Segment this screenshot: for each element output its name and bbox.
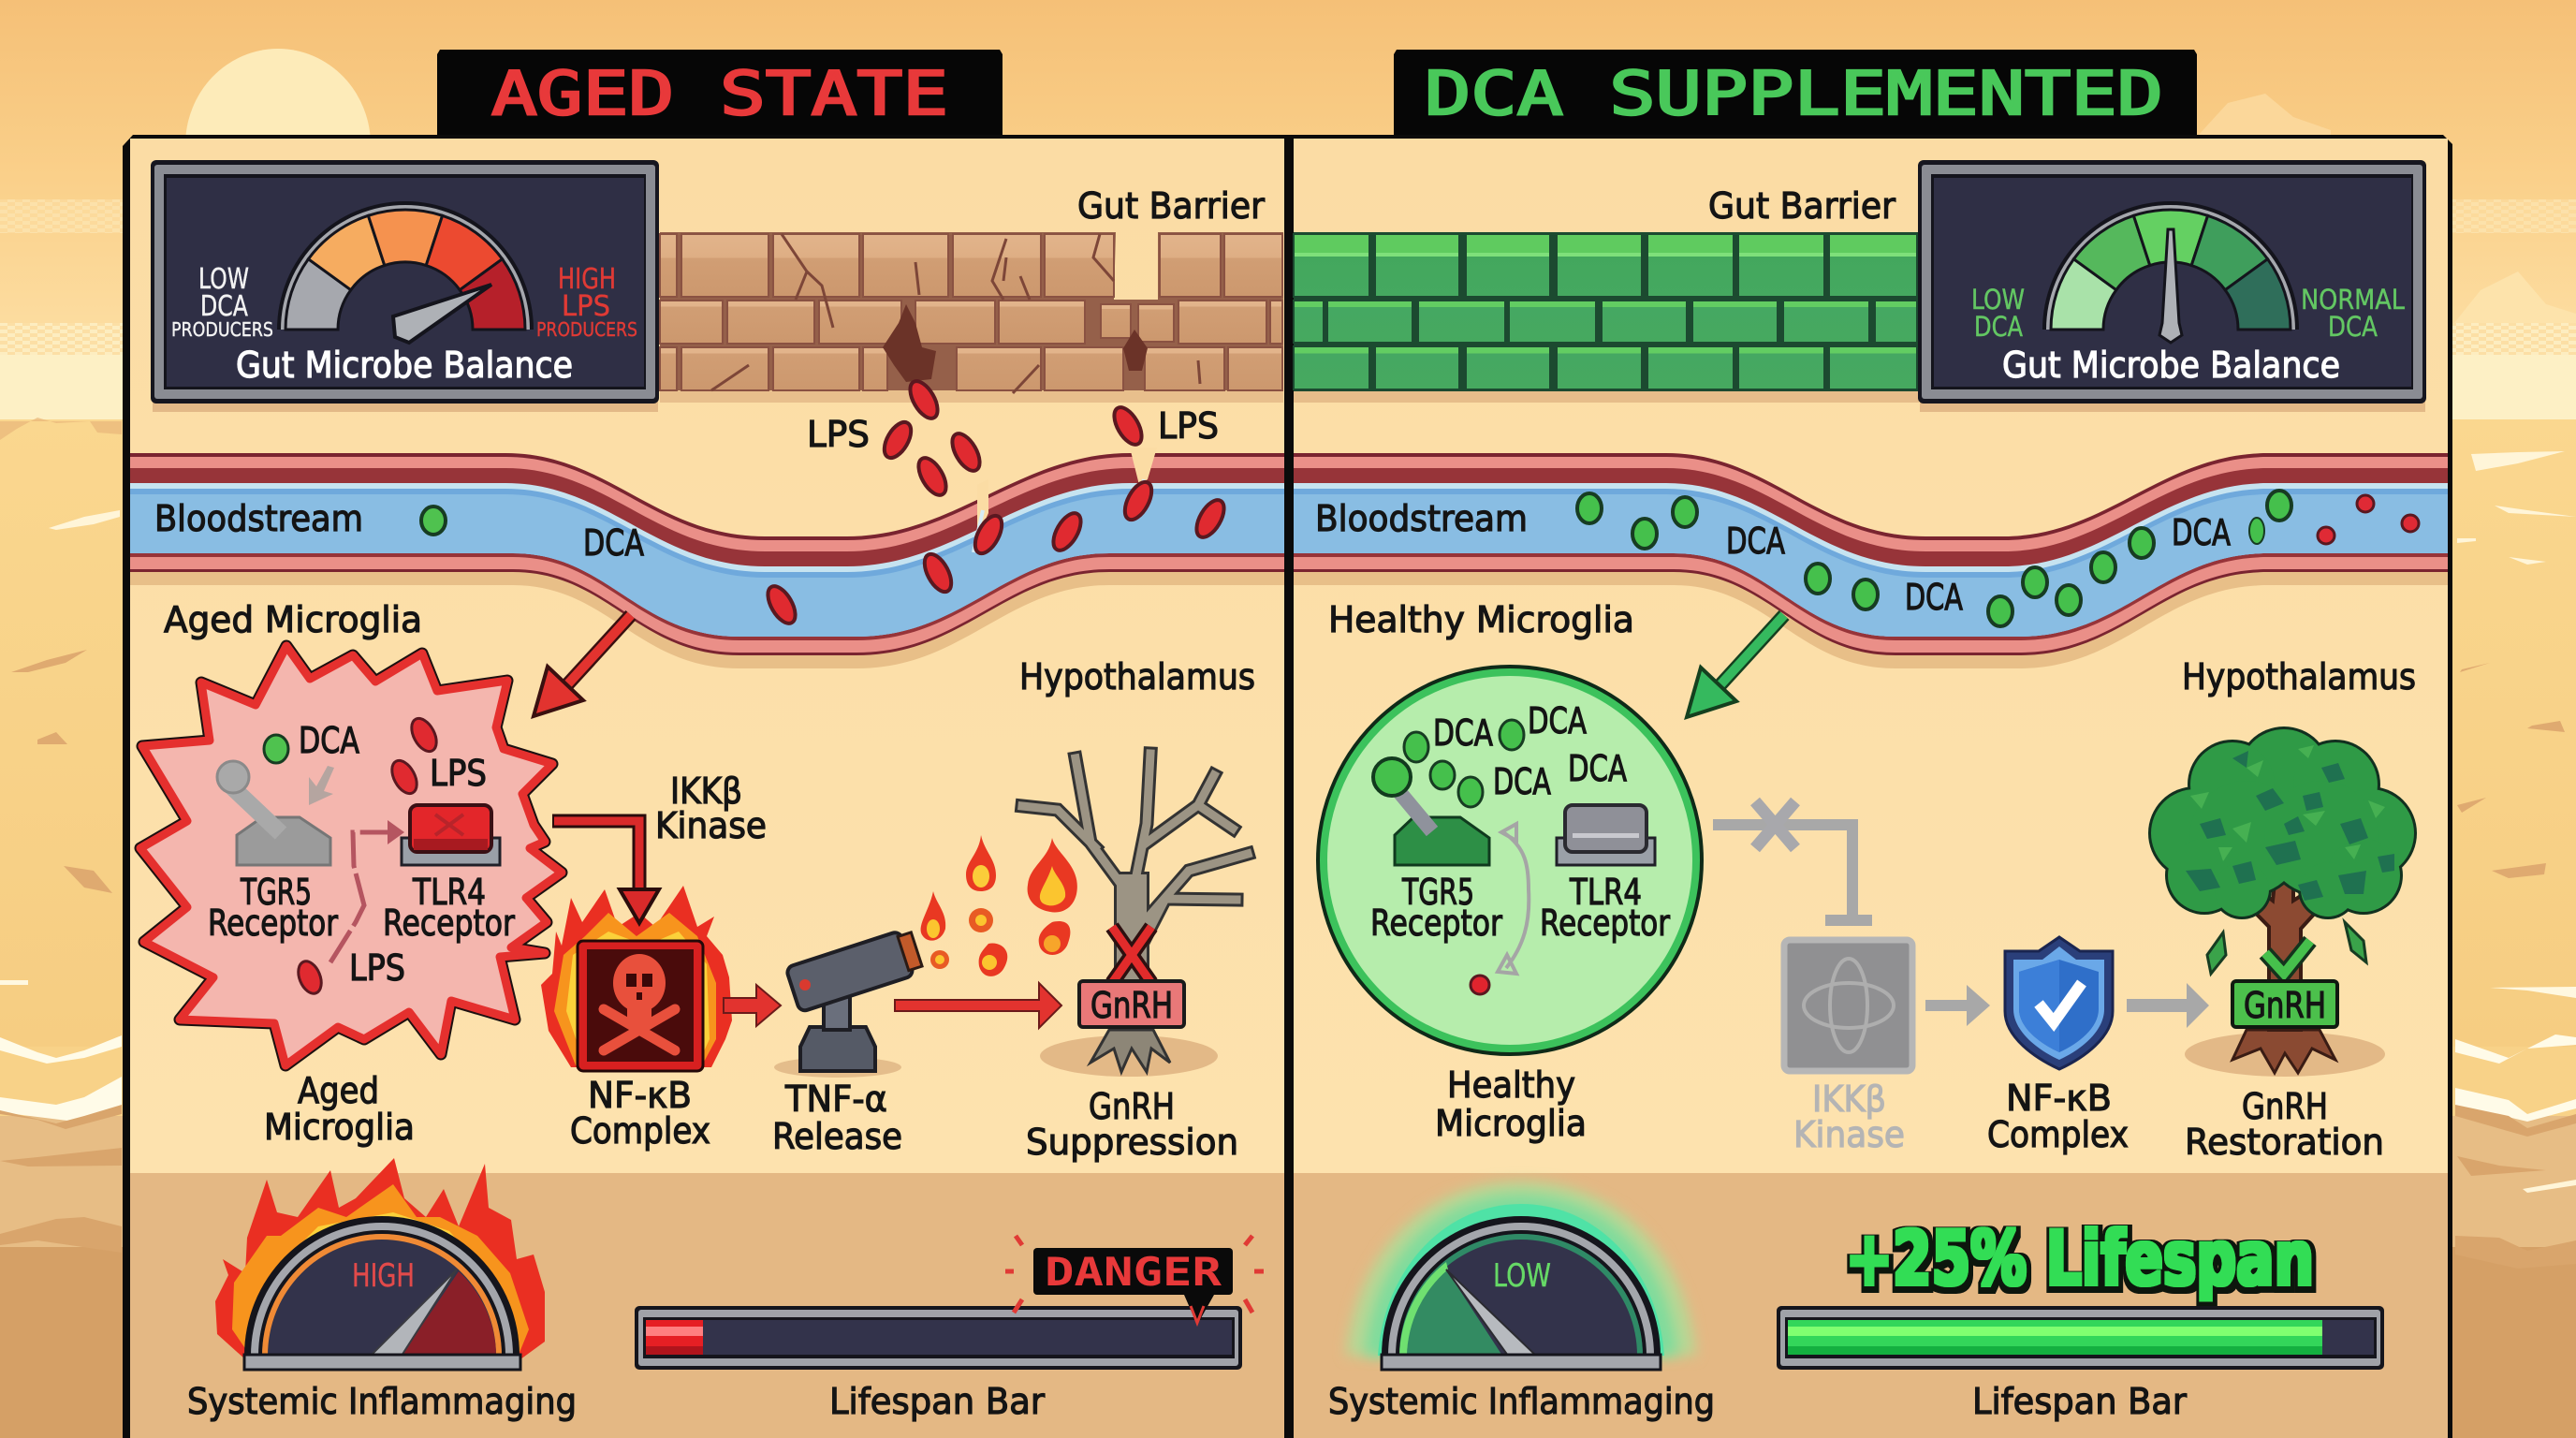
fireballs bbox=[921, 835, 1077, 976]
GnRH plaque restored bbox=[2232, 981, 2337, 1027]
healthy microglia round cell: Receptor bbox=[1540, 902, 1670, 944]
title tab: AGED STATE bbox=[437, 50, 1003, 142]
red LPS dot bbox=[1471, 976, 1489, 994]
gauge panel: gut microbe balance aged: HIGH bbox=[558, 263, 616, 296]
icon: TNF-alpha cannon bbox=[774, 931, 922, 1078]
gauge panel: gut microbe balance supplemented bbox=[1918, 160, 2426, 412]
label: healthy microglia caption: Microglia bbox=[1435, 1103, 1587, 1144]
healthy microglia round cell: Receptor bbox=[1370, 902, 1502, 944]
LPS molecules in aged cell bbox=[294, 714, 442, 997]
healthy microglia round cell: DCA bbox=[1528, 700, 1587, 741]
label: GnRH suppression: Suppression bbox=[1026, 1122, 1238, 1163]
aged microglia spiky cell: LPS bbox=[430, 753, 487, 794]
gauge panel: gut microbe balance supplemented: DCA bbox=[1974, 311, 2023, 343]
label: TNF alpha release: Release bbox=[772, 1116, 902, 1157]
callout: danger bbox=[1005, 1236, 1264, 1325]
canopy bbox=[2148, 726, 2417, 919]
heading: aged microglia: Aged Microglia bbox=[164, 599, 422, 640]
callout: plus 25 percent lifespan: +25% Lifespan bbox=[1846, 1215, 2314, 1302]
activated TLR4 button bbox=[402, 805, 500, 865]
heading: healthy microglia: Healthy Microglia bbox=[1328, 599, 1634, 640]
GnRH plaque suppressed bbox=[1079, 981, 1184, 1027]
gauge: systemic inflammaging low with green glow: LOW bbox=[1493, 1257, 1551, 1295]
icon: healthy tree with restored GnRH: GnRH bbox=[2244, 985, 2326, 1026]
gauge: systemic inflammaging high with flames bbox=[215, 1158, 545, 1370]
bloodstream labels bbox=[154, 405, 2231, 618]
title tab: DCA SUPPLEMENTED: DCA SUPPLEMENTED bbox=[1425, 60, 2163, 129]
gauge panel: gut microbe balance supplemented: NORMAL bbox=[2301, 284, 2405, 315]
label: aged microglia caption: Microglia bbox=[264, 1107, 415, 1148]
label: TNF alpha release bbox=[772, 1078, 902, 1157]
bloodstream labels: DCA bbox=[2172, 512, 2231, 553]
label: NF-kB complex aged: NF-κB bbox=[588, 1075, 692, 1116]
heading: hypothalamus left: Hypothalamus bbox=[1019, 656, 1255, 697]
icon: grey IKK kinase box bbox=[1784, 940, 1912, 1071]
label: IKK beta kinase faded bbox=[1793, 1078, 1905, 1155]
label: NF-kB complex supplemented bbox=[1987, 1078, 2129, 1155]
gauge panel: gut microbe balance supplemented: LOW bbox=[1971, 284, 2025, 315]
label: GnRH restoration bbox=[2185, 1086, 2384, 1163]
green check bbox=[2265, 941, 2310, 974]
gauge: systemic inflammaging low with green glow bbox=[1346, 1181, 1696, 1370]
healthy microglia round cell: TGR5 bbox=[1401, 872, 1474, 913]
aged microglia spiky cell: Receptor bbox=[208, 902, 338, 944]
gauge: systemic inflammaging high with flames: HIGH bbox=[352, 1257, 415, 1295]
label: GnRH suppression: GnRH bbox=[1089, 1086, 1175, 1127]
label: GnRH restoration: GnRH bbox=[2242, 1086, 2328, 1127]
aged microglia spiky cell: DCA bbox=[299, 720, 359, 761]
label: lifespan bar left: Lifespan Bar bbox=[829, 1381, 1045, 1422]
blocked signal arrow bbox=[1498, 824, 1529, 974]
aged microglia spiky cell bbox=[140, 646, 562, 1065]
DCA molecules supplemented bloodstream bbox=[1577, 491, 2291, 626]
gut barrier: intact green bricks bbox=[1294, 232, 1919, 403]
bloodstream labels: LPS bbox=[807, 414, 870, 455]
aged microglia spiky cell: LPS bbox=[349, 947, 405, 989]
DCA molecules in healthy cell bbox=[1404, 720, 1524, 807]
label: NF-kB complex aged: Complex bbox=[570, 1110, 710, 1152]
label: NF-kB complex supplemented: Complex bbox=[1987, 1114, 2129, 1155]
title tab: AGED STATE: AGED STATE bbox=[491, 60, 948, 129]
gauge panel: gut microbe balance aged: PRODUCERS bbox=[536, 318, 637, 341]
LPS remnants supplemented bloodstream bbox=[2318, 495, 2419, 544]
label: healthy microglia caption: Healthy bbox=[1447, 1064, 1575, 1106]
arrow: kinase into NF-kB bbox=[552, 821, 659, 923]
bloodstream labels: LPS bbox=[1158, 405, 1219, 447]
gauge panel: gut microbe balance aged: LPS bbox=[562, 290, 610, 323]
aged microglia spiky cell: TGR5 bbox=[240, 872, 312, 913]
arrow: vessel to healthy microglia bbox=[1687, 615, 1784, 717]
label: IKK beta kinase faded: IKKβ bbox=[1812, 1078, 1886, 1120]
label: IKK beta kinase bbox=[655, 770, 767, 846]
DCA molecule in aged cell bbox=[264, 735, 288, 763]
bloodstream labels: Bloodstream bbox=[1315, 498, 1528, 539]
label: aged microglia caption bbox=[264, 1070, 415, 1148]
healthy microglia round cell: DCA bbox=[1433, 712, 1493, 754]
signal path bbox=[330, 832, 388, 962]
label: systemic inflammaging right: Systemic Inflammaging bbox=[1328, 1381, 1715, 1422]
arrow: shield to GnRH bbox=[2127, 983, 2209, 1028]
arrow: TNF to GnRH bbox=[895, 983, 1061, 1028]
label: NF-kB complex aged bbox=[570, 1075, 710, 1152]
label: IKK beta kinase: IKKβ bbox=[670, 770, 742, 812]
icon: dead tree with suppressed GnRH bbox=[1022, 754, 1248, 1077]
gauge needle bbox=[393, 285, 491, 343]
label: aged microglia caption: Aged bbox=[298, 1070, 379, 1111]
heading: gut barrier left: Gut Barrier bbox=[1077, 185, 1265, 227]
lifespan bar aged bbox=[635, 1306, 1242, 1370]
gut barrier: cracked bricks bbox=[660, 232, 1283, 403]
icon: blue shield with check bbox=[2005, 937, 2113, 1069]
icon: healthy tree with restored GnRH bbox=[2148, 726, 2417, 1077]
label: IKK beta kinase faded: Kinase bbox=[1793, 1114, 1905, 1155]
falling leaves bbox=[2207, 922, 2366, 974]
DCA molecule aged bloodstream bbox=[421, 506, 446, 535]
gauge needle bbox=[2159, 229, 2182, 343]
LPS particles crossing the barrier bbox=[762, 376, 1230, 628]
bloodstream vessel aged with breached wall bbox=[130, 448, 1284, 668]
bloodstream labels: DCA bbox=[1905, 577, 1963, 618]
gauge panel: gut microbe balance aged: DCA bbox=[200, 290, 248, 323]
healthy microglia round cell bbox=[1321, 669, 1699, 1051]
gauge panel: gut microbe balance aged: LOW bbox=[198, 263, 249, 296]
gauge panel: gut microbe balance supplemented: DCA bbox=[2328, 311, 2378, 343]
red X on tree bbox=[1112, 927, 1151, 983]
icon: dead tree with suppressed GnRH: GnRH bbox=[1090, 985, 1173, 1026]
inactive TGR5 lever bbox=[217, 761, 334, 865]
active TGR5 lever bbox=[1373, 758, 1489, 865]
label: GnRH restoration: Restoration bbox=[2185, 1122, 2384, 1163]
arrow: vessel to aged microglia bbox=[534, 615, 631, 716]
gauge panel: gut microbe balance aged bbox=[151, 160, 659, 412]
gauge panel: gut microbe balance supplemented: Gut Microbe Balance bbox=[2002, 345, 2340, 386]
callout: danger: DANGER bbox=[1045, 1249, 1222, 1295]
arrow: grey kinase to shield bbox=[1925, 985, 1990, 1026]
healthy microglia round cell: DCA bbox=[1493, 761, 1551, 802]
bloodstream labels: Bloodstream bbox=[154, 498, 363, 539]
aged microglia spiky cell: Receptor bbox=[383, 902, 515, 944]
label: NF-kB complex supplemented: NF-κB bbox=[2006, 1078, 2112, 1119]
aged microglia spiky cell: TLR4 bbox=[412, 872, 486, 913]
bloodstream labels: DCA bbox=[1726, 521, 1785, 562]
label: systemic inflammaging left: Systemic Inflammaging bbox=[187, 1381, 577, 1422]
gauge panel: gut microbe balance aged: Gut Microbe Balance bbox=[236, 345, 573, 386]
label: GnRH suppression bbox=[1026, 1086, 1238, 1163]
label: TNF alpha release: TNF-α bbox=[784, 1078, 887, 1120]
arrow: NF-kB to TNF bbox=[724, 985, 781, 1026]
label: lifespan bar right: Lifespan Bar bbox=[1972, 1381, 2187, 1422]
label: IKK beta kinase: Kinase bbox=[655, 805, 767, 846]
heading: gut barrier right: Gut Barrier bbox=[1708, 185, 1895, 227]
blocked inhibition line bbox=[1713, 801, 1872, 920]
healthy microglia round cell: DCA bbox=[1568, 748, 1627, 789]
title tab: DCA SUPPLEMENTED bbox=[1394, 50, 2197, 142]
icon: burning NF-kB skull box bbox=[541, 886, 732, 1071]
inactive TLR4 button bbox=[1557, 805, 1655, 865]
label: healthy microglia caption bbox=[1435, 1064, 1587, 1144]
lifespan bar supplemented bbox=[1777, 1306, 2384, 1370]
bloodstream labels: DCA bbox=[583, 522, 644, 564]
gauge panel: gut microbe balance aged: PRODUCERS bbox=[171, 318, 273, 341]
bloodstream vessel supplemented bbox=[1294, 453, 2448, 668]
heading: hypothalamus right: Hypothalamus bbox=[2182, 656, 2416, 697]
healthy microglia round cell: TLR4 bbox=[1569, 872, 1642, 913]
